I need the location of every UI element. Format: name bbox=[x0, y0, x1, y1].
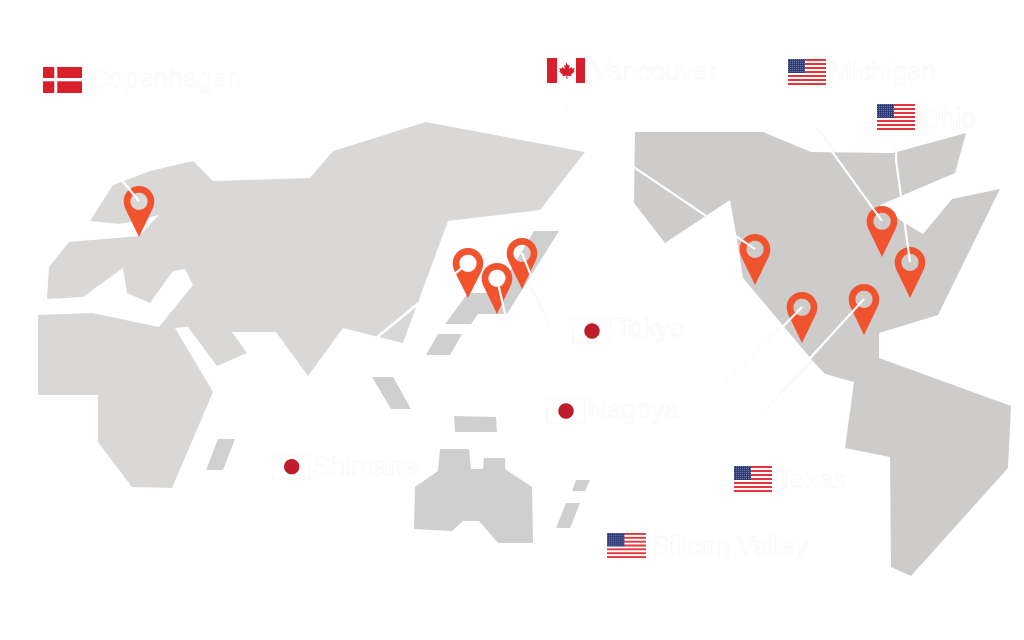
label: Tokyo: Tokyo bbox=[615, 313, 684, 343]
label: Vancouver: Vancouver bbox=[592, 56, 717, 86]
pin: Tokyo bbox=[507, 238, 537, 289]
pin: Silicon Valley bbox=[787, 292, 817, 343]
flag: Japan (Tokyo) bbox=[573, 319, 610, 343]
flag: Denmark bbox=[43, 67, 82, 93]
connector: Texas bbox=[752, 299, 864, 467]
flag: Canada bbox=[547, 58, 585, 83]
pin: Vancouver bbox=[740, 234, 770, 285]
connector: Ohio bbox=[896, 130, 910, 262]
label: Shimane: Shimane bbox=[313, 451, 418, 481]
label: Texas: Texas bbox=[777, 464, 846, 494]
map: Asia-Pacific islands bbox=[372, 231, 590, 528]
connector: Nagoya bbox=[497, 279, 547, 412]
connector: Vancouver bbox=[565, 83, 755, 249]
label: Ohio: Ohio bbox=[920, 103, 976, 133]
pin: Shimane bbox=[453, 248, 483, 298]
connector: Michigan bbox=[805, 85, 882, 221]
pin: Texas bbox=[849, 284, 879, 335]
map: Europe, Asia and Africa bbox=[38, 122, 585, 488]
map: Madagascar bbox=[206, 439, 235, 470]
flag: United States (Texas) bbox=[734, 466, 772, 492]
label: Copenhagen: Copenhagen bbox=[90, 63, 242, 93]
pin: Copenhagen bbox=[124, 186, 154, 237]
label: Michigan: Michigan bbox=[830, 56, 936, 86]
connector: Copenhagen bbox=[63, 93, 139, 201]
flag: United States (Michigan) bbox=[788, 59, 826, 85]
label: Nagoya: Nagoya bbox=[588, 394, 680, 424]
label: Silicon Valley: Silicon Valley bbox=[652, 531, 808, 561]
connector: Tokyo bbox=[522, 253, 573, 331]
pin: Nagoya bbox=[482, 263, 512, 314]
flag: United States (Silicon Valley) bbox=[607, 533, 646, 558]
connector: Shimane bbox=[292, 263, 468, 453]
flag: United States (Ohio) bbox=[877, 104, 915, 130]
map: Australia bbox=[414, 449, 533, 543]
connector: Silicon Valley bbox=[625, 307, 802, 533]
pin: Ohio bbox=[895, 247, 925, 298]
flag: Japan (Shimane) bbox=[273, 455, 310, 479]
flag: Japan (Nagoya) bbox=[547, 399, 585, 423]
pin: Michigan bbox=[867, 206, 897, 257]
map: the Americas bbox=[634, 132, 1011, 576]
